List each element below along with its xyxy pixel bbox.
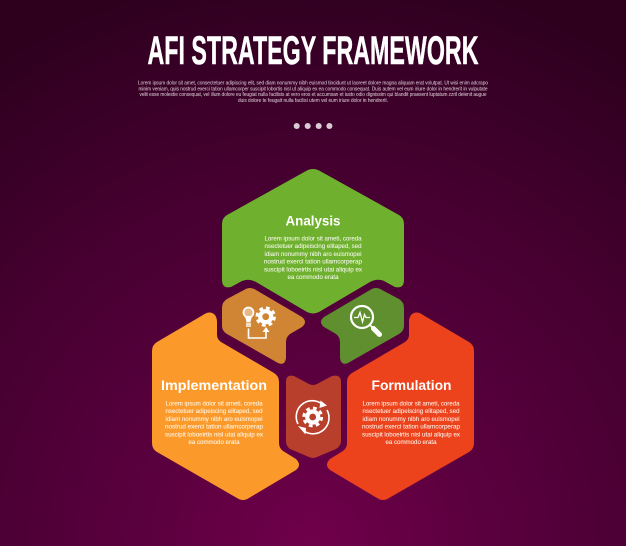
icon: lightbulb and gear [244,308,275,338]
implementation text: idiam nonummy nibh aro euismopei [166,416,263,423]
implementation heading: Implementation [161,378,267,393]
panel: implementation [152,312,299,500]
analysis text: Lorem ipsum dolor sit ameti, coreda [264,236,362,242]
implementation text [165,400,264,446]
panel: small red segment [286,376,341,458]
analysis text: idiam nonummy nibh aro euismopei [264,251,362,258]
intro paragraph: minim veniam, quis nostrud exerci tation ullamcorper suscipit lobortis nisl ut aliquip ex ea commodo consequat. Duis autem vel eum iriure dolor in hendrerit in vulputate [138,86,488,92]
formulation text: nostrud exerci tation ullamcorperap [362,424,460,431]
analysis text: ea commodo erata [288,274,339,281]
analysis text: nsectetuer adipeiscing elitaped, sed [264,243,362,250]
analysis text: suscipit loboeirtis nisl utai aliquip ex [264,266,363,273]
icon: magnifier with pulse [351,306,380,334]
intro paragraph: Lorem ipsum dolor sit amet, consectetuer adipiscing elit, sed diam nonummy nibh euismod tincidunt ut laoreet dolore magna aliquam erat volutpat. Ut wisi enim adcrapo [138,80,488,86]
implementation text: Lorem ipsum dolor sit ameti, coreda [166,400,263,408]
implementation text: suscipit loboeirtis nisl utai aliquip ex [165,431,264,438]
panel: small orange segment [222,288,305,364]
implementation text: nsectetuer adipeiscing elitaped, sed [166,408,263,415]
implementation hexagon [152,312,299,500]
implementation text: ea commodo erata [188,439,240,446]
analysis text: nostrud exerci tation ullamcorperap [264,259,362,266]
formulation text: ea commodo erata [386,439,437,446]
panel: small green segment [321,288,404,364]
formulation hexagon [327,312,474,500]
formulation heading: Formulation [372,378,452,393]
icon: gear with cycle arrows [296,400,329,434]
intro paragraph [138,80,488,104]
panel: analysis [222,169,404,314]
formulation text [362,400,461,446]
pagination dots [294,123,332,129]
formulation text: nsectetuer adipeiscing elitaped, sed [362,408,460,415]
formulation text: suscipit loboeirtis nisl utai aliquip ex [362,431,461,438]
formulation text: idiam nonummy nibh aro euismopei [362,416,460,423]
analysis text [264,236,363,281]
implementation text: nostrud exerci tation ullamcorperap [165,424,263,431]
analysis hexagon [222,169,404,314]
formulation text: Lorem ipsum dolor sit ameti, coreda [362,400,460,408]
intro paragraph: velit esse molestie consequat, vel illum dolore eu feugiat nulla facilisis at vero eros et accumsan et iusto odio dignissim qui blandit praesent luptatum zzril delenit augue [140,92,487,98]
analysis heading: Analysis [286,214,340,228]
intro paragraph: duis dolore te feugait nulla facilisi utem vel eum iriure dolor in hendrerit. [238,98,388,104]
panel: formulation [327,312,474,500]
